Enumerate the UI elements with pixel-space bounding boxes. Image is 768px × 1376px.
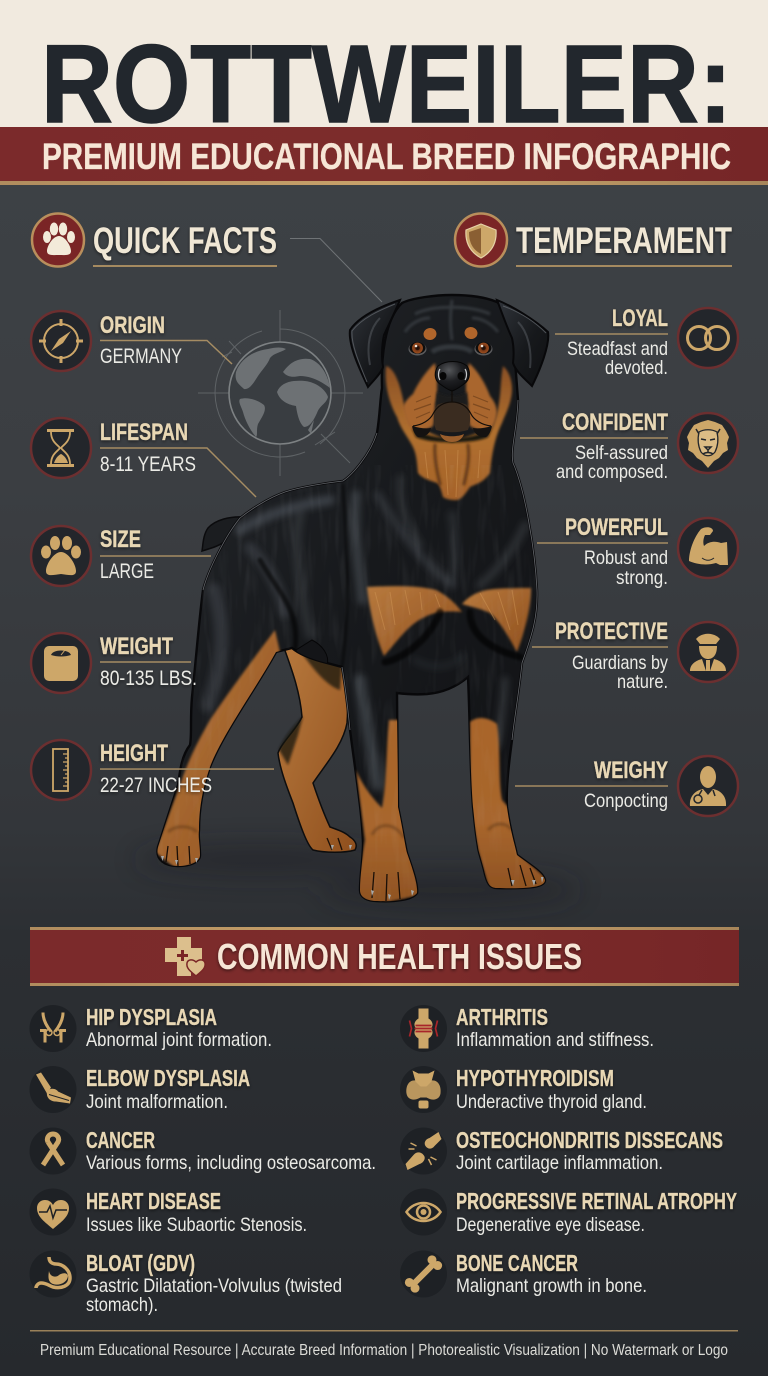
- dog ground shadow: [135, 844, 580, 908]
- health issue: arthritis: Inflammation and stiffness.: [456, 1029, 654, 1051]
- quick fact: weight: 80-135 LBS.: [100, 667, 197, 690]
- health issue: hip dysplasia: Abnormal joint formation.: [86, 1029, 272, 1051]
- icon: stomach: [30, 1250, 76, 1298]
- health issue: bloat: [30, 1250, 342, 1316]
- muzzle wrinkles: [414, 396, 490, 418]
- icon: rings: [678, 308, 738, 368]
- health issues banner: COMMON HEALTH ISSUES: [217, 936, 582, 977]
- icon: paw: [31, 526, 91, 586]
- panel heading: quick facts: [32, 214, 277, 267]
- quick fact: size: LARGE: [100, 560, 154, 583]
- icon: ribbon: [30, 1128, 76, 1174]
- hind leg tan: [155, 630, 280, 870]
- temperament: loyal: devoted.: [605, 357, 668, 379]
- chest fur ticks: [375, 450, 518, 630]
- front right leg tan: [470, 718, 548, 892]
- mouth shadow: [434, 402, 470, 432]
- temperament: confident: Self-assured: [575, 442, 668, 464]
- health issue: progressive retinal atrophy: [400, 1188, 737, 1236]
- head markings: [403, 300, 498, 442]
- chest patch right: [462, 588, 531, 652]
- health issue: cancer: [30, 1127, 376, 1174]
- eyebrow tan: [423, 327, 437, 341]
- far hind leg shading: [279, 650, 342, 765]
- quick fact: origin: GERMANY: [100, 345, 182, 368]
- health issue: bone cancer: [390, 1241, 647, 1307]
- health issue: hip dysplasia: [30, 1004, 272, 1052]
- icon: elbow bones: [30, 1066, 76, 1113]
- health issue: osteochondritis dissecans: [400, 1127, 723, 1174]
- connector: quick facts to dog: [290, 238, 382, 302]
- fur texture: [202, 465, 520, 834]
- health issue: bloat: BLOAT (GDV): [86, 1250, 195, 1276]
- chest patch left: [367, 586, 462, 656]
- chin shadow: [412, 428, 492, 442]
- temperament: loyal: LOYAL: [612, 305, 668, 332]
- ear highlights: [352, 304, 546, 382]
- temperament: weighy: [584, 756, 738, 816]
- right ear: [497, 300, 548, 386]
- health issue: osteochondritis dissecans: Joint cartilage inflammation.: [456, 1152, 663, 1174]
- quick fact: lifespan: [31, 418, 196, 478]
- icon: ruler: [31, 740, 91, 800]
- temperament: confident: CONFIDENT: [562, 409, 668, 436]
- globe graphic: [198, 310, 363, 476]
- dog silhouette: [157, 295, 545, 901]
- icon: fractured joint: [400, 1128, 447, 1174]
- far hind leg: [278, 645, 356, 852]
- health issue: bone cancer: Malignant growth in bone.: [456, 1275, 647, 1297]
- icon: heart with pulse: [30, 1188, 76, 1236]
- quick fact: height: [31, 740, 274, 800]
- paws: [166, 838, 536, 901]
- health issue: hypothyroidism: HYPOTHYROIDISM: [456, 1065, 614, 1091]
- temperament: protective: nature.: [617, 671, 668, 693]
- temperament: powerful: [565, 514, 738, 589]
- temperament: protective: PROTECTIVE: [555, 618, 668, 645]
- icon: scale: [31, 633, 91, 693]
- temperament: loyal: [567, 305, 738, 379]
- temperament: powerful: POWERFUL: [565, 514, 668, 541]
- front left leg tan: [355, 720, 420, 905]
- right eye: [474, 342, 492, 356]
- dark fur folds: [260, 445, 520, 667]
- health issue: elbow dysplasia: Joint malformation.: [86, 1091, 228, 1113]
- muzzle left tan: [403, 363, 437, 430]
- quick fact: height: 22-27 INCHES: [100, 774, 212, 797]
- temperament: protective: Guardians by: [572, 652, 668, 674]
- bib and cheek strips: [386, 366, 512, 500]
- left eye: [408, 342, 426, 356]
- health issue: progressive retinal atrophy: Degenerative eye disease.: [456, 1214, 645, 1236]
- icon: eye: [400, 1188, 447, 1236]
- health issue: heart disease: HEART DISEASE: [86, 1188, 221, 1214]
- icon: hip joint: [30, 1005, 76, 1052]
- subtitle banner: [0, 127, 768, 185]
- icon: bone: [390, 1241, 457, 1307]
- temperament: confident: and composed.: [556, 461, 668, 483]
- coat markings and fur: [150, 366, 560, 910]
- quick fact: lifespan: LIFESPAN: [100, 419, 188, 446]
- panel heading: temperament: [455, 214, 732, 267]
- temperament: loyal: Steadfast and: [567, 338, 668, 360]
- panel heading: quick facts: QUICK FACTS: [93, 220, 277, 261]
- quick fact: weight: [31, 633, 197, 693]
- lip line: [413, 391, 491, 426]
- soft sheen: [208, 478, 525, 785]
- health issue: bloat: stomach).: [86, 1294, 158, 1316]
- health issue: bone cancer: BONE CANCER: [456, 1250, 578, 1276]
- flews corners: [412, 426, 431, 437]
- temperament: protective: [555, 618, 738, 693]
- leg tan shading: [168, 824, 512, 838]
- health issue: arthritis: [400, 1004, 654, 1052]
- icon: lion: [678, 413, 738, 473]
- icon: officer: [678, 622, 738, 682]
- quick fact: lifespan: 8-11 YEARS: [100, 453, 196, 476]
- claws: [161, 845, 544, 900]
- icon: thyroid gland: [400, 1066, 447, 1113]
- health issue: cancer: CANCER: [86, 1127, 155, 1153]
- quick fact: weight: WEIGHT: [100, 633, 173, 660]
- icon: hourglass: [31, 418, 91, 478]
- silhouette rim light: [203, 400, 537, 740]
- icon: flexed arm: [678, 518, 738, 578]
- lower lip: [440, 434, 464, 442]
- icon: doctor: [678, 756, 738, 816]
- muzzle right tan: [466, 363, 497, 431]
- health issue: elbow dysplasia: [30, 1065, 250, 1113]
- temperament: weighy: Conpocting: [584, 790, 668, 812]
- quick fact: height: HEIGHT: [100, 740, 168, 767]
- health issue: cancer: Various forms, including osteosarcoma.: [86, 1152, 376, 1174]
- skull highlight: [405, 300, 498, 352]
- connector lines: temperament: [515, 334, 668, 786]
- connector lines: quick facts: [100, 340, 256, 662]
- muzzle midline: [436, 392, 468, 406]
- rottweiler illustration: [150, 295, 560, 910]
- quick fact: origin: ORIGIN: [100, 312, 165, 339]
- tail: [202, 517, 244, 551]
- temperament: weighy: WEIGHY: [594, 757, 668, 784]
- health issue: elbow dysplasia: ELBOW DYSPLASIA: [86, 1065, 250, 1091]
- header panel: [0, 0, 768, 146]
- health issue: heart disease: Issues like Subaortic Stenosis.: [86, 1214, 307, 1236]
- health issues banner: [30, 927, 739, 986]
- icon: inflamed joint: [400, 1005, 447, 1052]
- left ear: [350, 300, 400, 387]
- nose: [435, 362, 469, 391]
- health issue: hypothyroidism: Underactive thyroid gland.: [456, 1091, 647, 1113]
- temperament: powerful: Robust and: [584, 547, 668, 569]
- health issue: bloat: Gastric Dilatation-Volvulus (twisted: [86, 1275, 342, 1297]
- health issue: arthritis: ARTHRITIS: [456, 1004, 548, 1030]
- icon: medical cross and heart: [165, 937, 205, 976]
- temperament: powerful: strong.: [616, 567, 668, 589]
- temperament: confident: [556, 409, 738, 483]
- sheath fold: [296, 640, 328, 662]
- quick fact: origin: [31, 311, 182, 371]
- health issue: heart disease: [30, 1188, 307, 1236]
- health issue: hip dysplasia: HIP DYSPLASIA: [86, 1004, 217, 1030]
- quick fact: size: [31, 526, 154, 586]
- health issue: hypothyroidism: [400, 1065, 647, 1113]
- quick fact: size: SIZE: [100, 526, 141, 553]
- icon: compass: [31, 311, 91, 371]
